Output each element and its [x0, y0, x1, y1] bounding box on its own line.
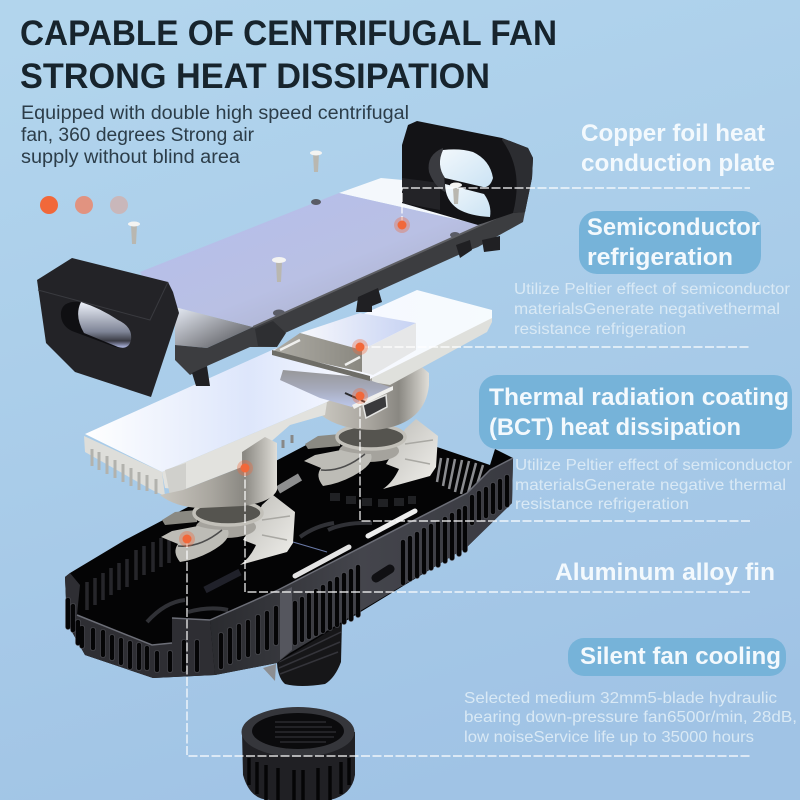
- tray left end: [37, 258, 179, 397]
- housing shell: [65, 437, 513, 678]
- label: silent fan cooling: Silent fan cooling: [580, 643, 781, 670]
- text: fan description: Selected medium 32mm5-blade hydraulic: [464, 690, 777, 707]
- bracket bar: [272, 350, 370, 381]
- tray rail: [175, 210, 525, 386]
- housing interior parts: [147, 523, 372, 622]
- text: semiconductor description: [514, 281, 791, 338]
- block top: [300, 313, 416, 350]
- housing vents: [68, 477, 507, 670]
- block right face: [362, 323, 416, 375]
- tray white backing: [339, 178, 481, 225]
- title: [20, 14, 557, 96]
- right end slats: [437, 458, 483, 498]
- text: coating description: Utilize Peltier effect of semiconductor: [515, 457, 793, 474]
- text: coating description: [515, 457, 793, 513]
- label: copper foil: Copper foil heat: [581, 120, 765, 147]
- usb bracket: [352, 386, 393, 409]
- leader line: silent fan: [187, 539, 750, 756]
- intro text: Equipped with double high speed centrifugal: [21, 103, 409, 124]
- screws: [128, 150, 462, 282]
- housing rear vents: [87, 535, 169, 610]
- title: STRONG HEAT DISSIPATION: [20, 57, 490, 96]
- intro text: [21, 103, 409, 168]
- housing front wall: [210, 458, 513, 675]
- right end upper opening: [440, 149, 493, 187]
- nut ring: [242, 707, 355, 800]
- leader line: copper foil: [402, 188, 750, 225]
- cylinder left: [160, 437, 277, 508]
- intro text: fan, 360 degrees Strong air: [21, 125, 255, 146]
- pagination dots: [40, 196, 128, 214]
- leader line: semiconductor: [360, 346, 750, 348]
- reflection area: [280, 370, 393, 407]
- tray metal plate: [140, 193, 481, 327]
- label: copper foil: [581, 120, 775, 177]
- label: silent fan cooling: [568, 638, 786, 676]
- metal rods: [278, 477, 415, 576]
- board edge: [372, 318, 492, 385]
- label: thermal radiation coating: [479, 375, 792, 449]
- intro text: supply without blind area: [21, 147, 240, 168]
- tray right end: [402, 121, 533, 225]
- housing vent rims: [68, 477, 507, 670]
- plate screw holes: [273, 199, 460, 316]
- metal block and plate: [272, 313, 416, 418]
- text: semiconductor description: materialsGenerate negativethermal: [514, 301, 780, 318]
- usb port: [363, 395, 387, 418]
- tray light section: [175, 307, 253, 348]
- label: semiconductor: Semiconductor: [587, 214, 760, 241]
- housing left wall: [65, 573, 215, 678]
- block left face: [272, 333, 362, 372]
- text: fan description: bearing down-pressure fan6500r/min, 28dB,: [464, 709, 797, 726]
- fan left: [161, 495, 295, 565]
- text: semiconductor description: resistance refrigeration: [514, 321, 686, 338]
- fan right: [304, 419, 438, 489]
- heat sink board: [84, 290, 492, 496]
- marker dots: [179, 217, 410, 547]
- text: coating description: materialsGenerate negative thermal: [515, 477, 786, 494]
- label: thermal radiation coating: Thermal radiation coating: [489, 384, 789, 411]
- threaded connector: [263, 620, 342, 686]
- text: fan description: [464, 690, 797, 746]
- label: semiconductor: refrigeration: [587, 244, 733, 271]
- cylinder right: [321, 363, 429, 430]
- label: thermal radiation coating: (BCT) heat dissipation: [489, 414, 741, 441]
- title: CAPABLE OF CENTRIFUGAL FAN: [20, 14, 557, 53]
- USB slot: [376, 569, 390, 578]
- label: aluminum alloy fin: Aluminum alloy fin: [555, 559, 775, 586]
- text: coating description: resistance refrigeration: [515, 496, 689, 513]
- right end dark inner rim: [429, 148, 445, 192]
- leader line: coating: [360, 396, 750, 521]
- board fins: [84, 436, 165, 496]
- label: semiconductor: [579, 211, 761, 274]
- right end lower opening: [445, 184, 490, 217]
- leader line: aluminum fin: [245, 468, 750, 592]
- text: semiconductor description: Utilize Peltier effect of semiconductor: [514, 281, 791, 298]
- label: copper foil: conduction plate: [581, 150, 775, 177]
- text: fan description: low noiseService life up to 35000 hours: [464, 729, 754, 746]
